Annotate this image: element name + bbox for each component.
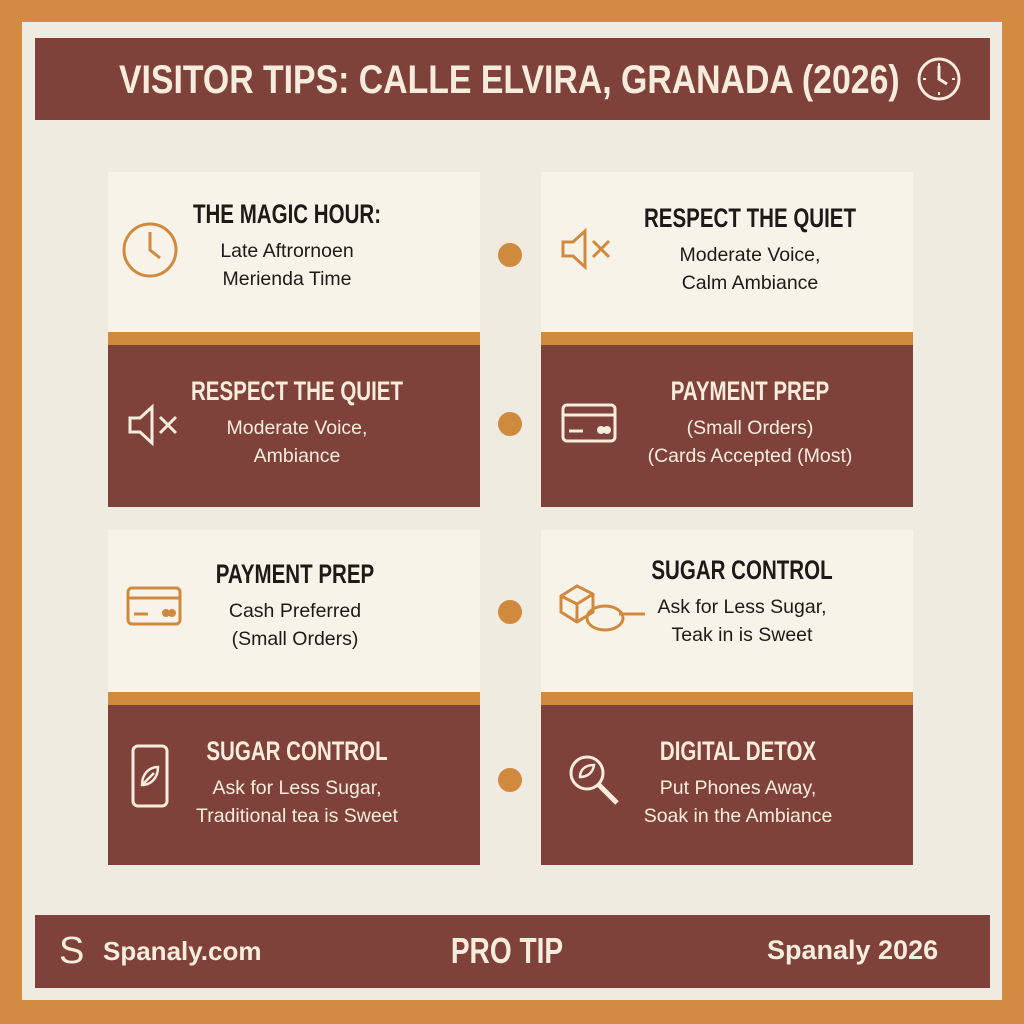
text: (Cards Accepted (Most)	[648, 445, 852, 467]
card: respect quiet left	[108, 345, 480, 507]
text: DIGITAL DETOX	[660, 736, 816, 766]
text: Moderate Voice,	[680, 244, 820, 266]
text	[193, 199, 381, 290]
text: PAYMENT PREP	[671, 376, 829, 406]
icon: mute	[562, 228, 610, 270]
title bar	[35, 38, 990, 120]
card: magic hour	[108, 172, 480, 332]
icon: phone	[132, 744, 168, 808]
icon: magnifier	[570, 756, 619, 805]
text: Put Phones Away,	[660, 777, 816, 799]
text	[196, 736, 398, 827]
text: (Small Orders)	[232, 628, 358, 650]
text: Ask for Less Sugar,	[657, 596, 827, 618]
text: Late Aftrornoen	[220, 240, 354, 262]
card: sugar control right	[541, 530, 913, 692]
text: SUGAR CONTROL	[206, 736, 388, 766]
text	[648, 376, 852, 467]
logo: S	[59, 930, 84, 972]
text: THE MAGIC HOUR:	[193, 199, 381, 229]
card: payment prep left	[108, 530, 480, 692]
icon: clock	[918, 58, 960, 100]
text	[651, 555, 833, 646]
footer bar	[35, 915, 990, 988]
text: Ambiance	[254, 445, 340, 467]
text: PAYMENT PREP	[216, 559, 374, 589]
card: respect quiet right	[541, 172, 913, 332]
pro tip: PRO TIP	[451, 930, 563, 971]
text: RESPECT THE QUIET	[191, 376, 403, 406]
text: Teak in is Sweet	[672, 624, 812, 646]
icon: mute	[128, 404, 177, 446]
text	[191, 376, 403, 467]
text: Calm Ambiance	[682, 272, 818, 294]
text	[644, 203, 856, 294]
text: RESPECT THE QUIET	[644, 203, 856, 233]
icon: sugar	[560, 584, 645, 632]
dots	[498, 243, 522, 792]
card: sugar control left	[108, 705, 480, 865]
text: Ask for Less Sugar,	[212, 777, 382, 799]
text: SUGAR CONTROL	[651, 555, 833, 585]
text: Soak in the Ambiance	[644, 805, 832, 827]
icon: clock	[122, 222, 178, 278]
icon: card	[126, 586, 182, 626]
title: VISITOR TIPS: CALLE ELVIRA, GRANADA (2026)	[119, 58, 900, 102]
text: (Small Orders)	[687, 417, 813, 439]
text	[644, 736, 832, 827]
card: payment prep right	[541, 345, 913, 507]
text: Merienda Time	[223, 268, 351, 290]
card: digital detox	[541, 705, 913, 865]
icon: card	[562, 404, 616, 442]
text: Traditional tea is Sweet	[196, 805, 398, 827]
text	[216, 559, 374, 650]
site: Spanaly.com	[103, 936, 261, 966]
text: Moderate Voice,	[227, 417, 367, 439]
copyright: Spanaly 2026	[767, 935, 938, 965]
text: Cash Preferred	[229, 600, 361, 622]
